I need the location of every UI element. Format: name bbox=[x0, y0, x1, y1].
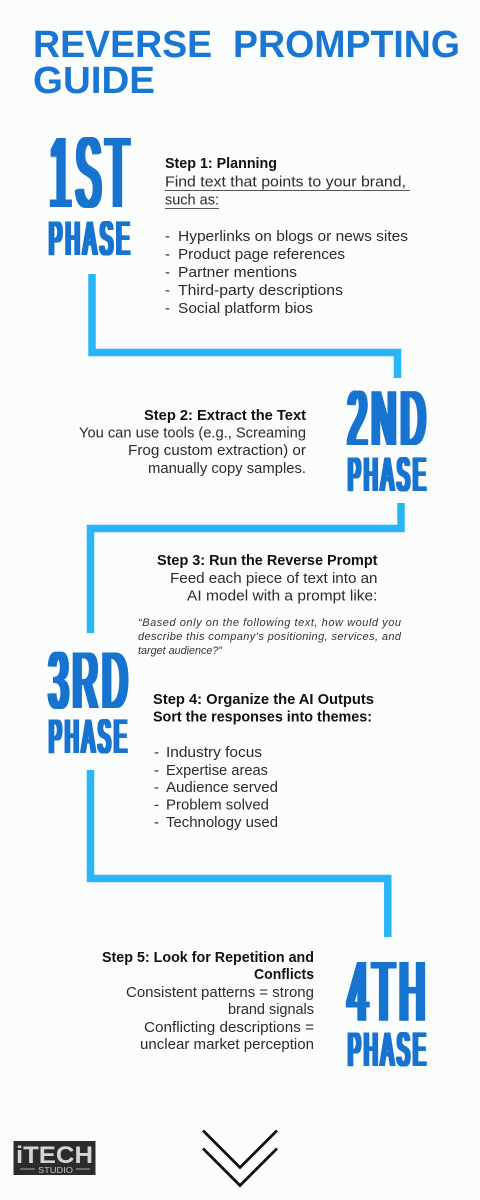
title: GUIDE bbox=[33, 60, 155, 102]
title: REVERSE PROMPTING bbox=[33, 24, 460, 66]
list: output themes: Industry focus bbox=[166, 744, 262, 761]
list: brand text sources: Third-party descriptions bbox=[178, 282, 343, 299]
list: output themes: - bbox=[154, 814, 159, 831]
logo: iTECH Studio: STUDIO bbox=[38, 1166, 73, 1175]
logo: iTECH Studio: iTECH bbox=[16, 1142, 93, 1169]
list: brand text sources: Product page references bbox=[178, 246, 345, 263]
title bbox=[33, 24, 460, 102]
step 4 text: Sort the responses into themes: bbox=[153, 710, 372, 726]
step 2 text: manually copy samples. bbox=[148, 460, 306, 477]
list: output themes: Problem solved bbox=[166, 796, 269, 814]
phase 2 label bbox=[348, 374, 430, 500]
step 5 text bbox=[102, 950, 314, 1053]
phase 1 label bbox=[49, 117, 134, 264]
list: brand text sources: - bbox=[165, 264, 170, 281]
quote: sample prompt: “Based only on the following text, how would you bbox=[138, 617, 401, 629]
logo: iTECH Studio bbox=[14, 1141, 96, 1175]
list: brand text sources: Social platform bios bbox=[178, 300, 313, 317]
list: output themes: Audience served bbox=[166, 779, 278, 796]
step 2 text bbox=[79, 408, 306, 477]
phase 4 label bbox=[348, 945, 430, 1076]
list: output themes: Technology used bbox=[166, 814, 278, 831]
arrow: connector from phase 2 to phase 3 bbox=[90, 503, 401, 633]
step 5 text: Conflicting descriptions = bbox=[144, 1019, 314, 1036]
list: brand text sources: - bbox=[165, 282, 170, 299]
arrow: connector from phase 1 to phase 2 bbox=[92, 274, 398, 378]
step 4 text bbox=[153, 692, 374, 831]
quote: sample prompt bbox=[138, 617, 402, 657]
step 3 text: Feed each piece of text into an bbox=[170, 570, 378, 587]
step 1 text: Find text that points to your brand, bbox=[165, 174, 406, 190]
text: 3RD bbox=[49, 636, 132, 726]
step 3 text: AI model with a prompt like: bbox=[187, 588, 378, 604]
step 4 text: Step 4: Organize the AI Outputs bbox=[153, 692, 374, 708]
list: brand text sources: Hyperlinks on blogs or news sites bbox=[178, 228, 408, 245]
step 1 text: Step 1: Planning bbox=[165, 156, 277, 172]
list: output themes: - bbox=[154, 762, 159, 779]
phase 3 label bbox=[49, 636, 132, 762]
step 5 text: Conflicts bbox=[254, 967, 314, 983]
quote: sample prompt: describe this company’s positioning, services, and bbox=[138, 631, 402, 643]
step 2 text: You can use tools (e.g., Screaming bbox=[79, 424, 306, 442]
step 5 text: brand signals bbox=[228, 1001, 314, 1018]
text: PHASE bbox=[49, 212, 133, 264]
icon: double chevron down bbox=[203, 1130, 277, 1186]
text: 1ST bbox=[50, 117, 134, 229]
list: output themes: - bbox=[154, 796, 159, 814]
arrow: connector from phase 3 to phase 4 bbox=[90, 770, 388, 937]
list: output themes bbox=[154, 744, 278, 831]
list: output themes: - bbox=[154, 744, 159, 761]
list: brand text sources: - bbox=[165, 246, 170, 263]
list: brand text sources: Partner mentions bbox=[178, 264, 297, 281]
text: PHASE bbox=[49, 710, 130, 762]
step 5 text: unclear market perception bbox=[140, 1036, 314, 1053]
step 5 text: Consistent patterns = strong bbox=[126, 984, 314, 1001]
step 1 text bbox=[165, 156, 410, 317]
list: brand text sources bbox=[165, 228, 408, 317]
step 3 text bbox=[138, 553, 402, 657]
quote: sample prompt: target audience?” bbox=[138, 645, 223, 657]
list: brand text sources: - bbox=[165, 228, 170, 245]
list: output themes: Expertise areas bbox=[166, 762, 268, 779]
step 3 text: Step 3: Run the Reverse Prompt bbox=[157, 553, 378, 569]
list: brand text sources: - bbox=[165, 300, 170, 317]
step 1 text: such as: bbox=[165, 192, 219, 208]
step 2 text: Frog custom extraction) or bbox=[128, 442, 306, 459]
step 2 text: Step 2: Extract the Text bbox=[144, 408, 306, 424]
list: output themes: - bbox=[154, 779, 159, 796]
step 5 text: Step 5: Look for Repetition and bbox=[102, 950, 314, 966]
